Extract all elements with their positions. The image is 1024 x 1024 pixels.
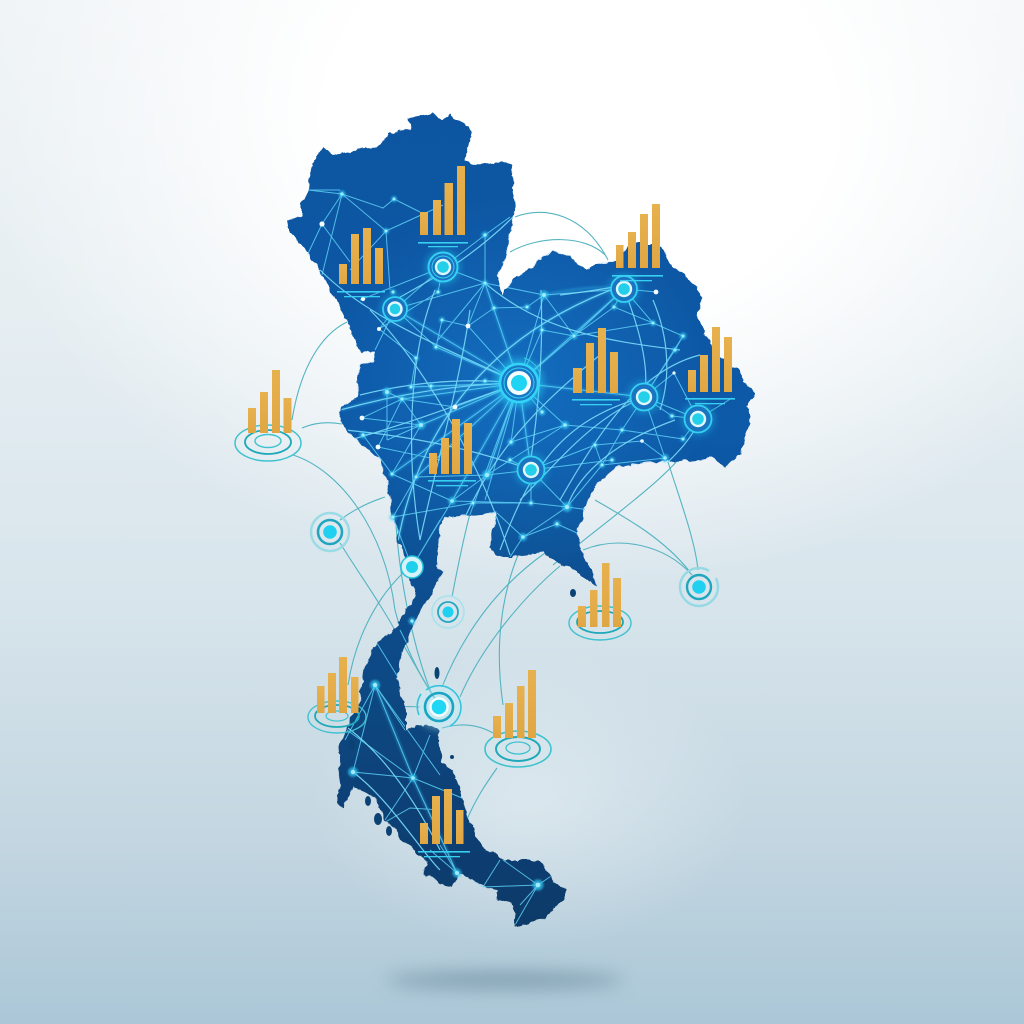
ring target: southwest	[308, 701, 366, 733]
bar chart: southwest	[317, 657, 358, 713]
curved network arcs	[320, 215, 700, 870]
bar chart: central east	[572, 328, 620, 405]
node: isthmus	[401, 556, 423, 578]
node: northeast	[609, 274, 639, 304]
bar chart: south	[418, 789, 470, 857]
node halos	[338, 190, 686, 890]
bar chart: northeast	[612, 204, 663, 281]
node: south hub	[417, 685, 461, 729]
node cores	[340, 192, 684, 887]
network lines	[305, 190, 732, 925]
white nodes	[319, 221, 676, 449]
bar chart: west	[248, 370, 292, 433]
map of Thailand	[287, 113, 755, 927]
node: gulf	[432, 596, 464, 628]
node: north	[426, 250, 460, 284]
bar chart: peninsula east	[493, 670, 536, 738]
infographic artwork	[234, 112, 756, 996]
node: southeast off-map	[680, 568, 718, 606]
node: east-central	[628, 381, 660, 413]
small network nodes	[319, 190, 686, 890]
islands	[349, 589, 576, 836]
ring target: peninsula east	[485, 731, 551, 767]
bar chart: central south	[428, 419, 476, 486]
node: west off-map	[311, 513, 349, 551]
hub node: central	[495, 358, 543, 407]
node: northwest	[381, 295, 409, 323]
glow under network	[340, 283, 644, 873]
bar chart: east	[685, 327, 735, 404]
outer connection arcs	[292, 212, 698, 822]
ring target: west	[235, 425, 301, 461]
bar chart: north	[418, 166, 468, 247]
ring target: gulf south	[569, 606, 631, 640]
node: east	[682, 403, 714, 435]
bar chart: northwest	[337, 228, 385, 297]
central land glow	[349, 218, 664, 557]
ground shadow	[385, 972, 625, 988]
bar chart: gulf south	[578, 563, 621, 627]
thin network segments	[305, 190, 732, 925]
node: south-central	[515, 454, 547, 486]
map outline	[287, 113, 755, 927]
